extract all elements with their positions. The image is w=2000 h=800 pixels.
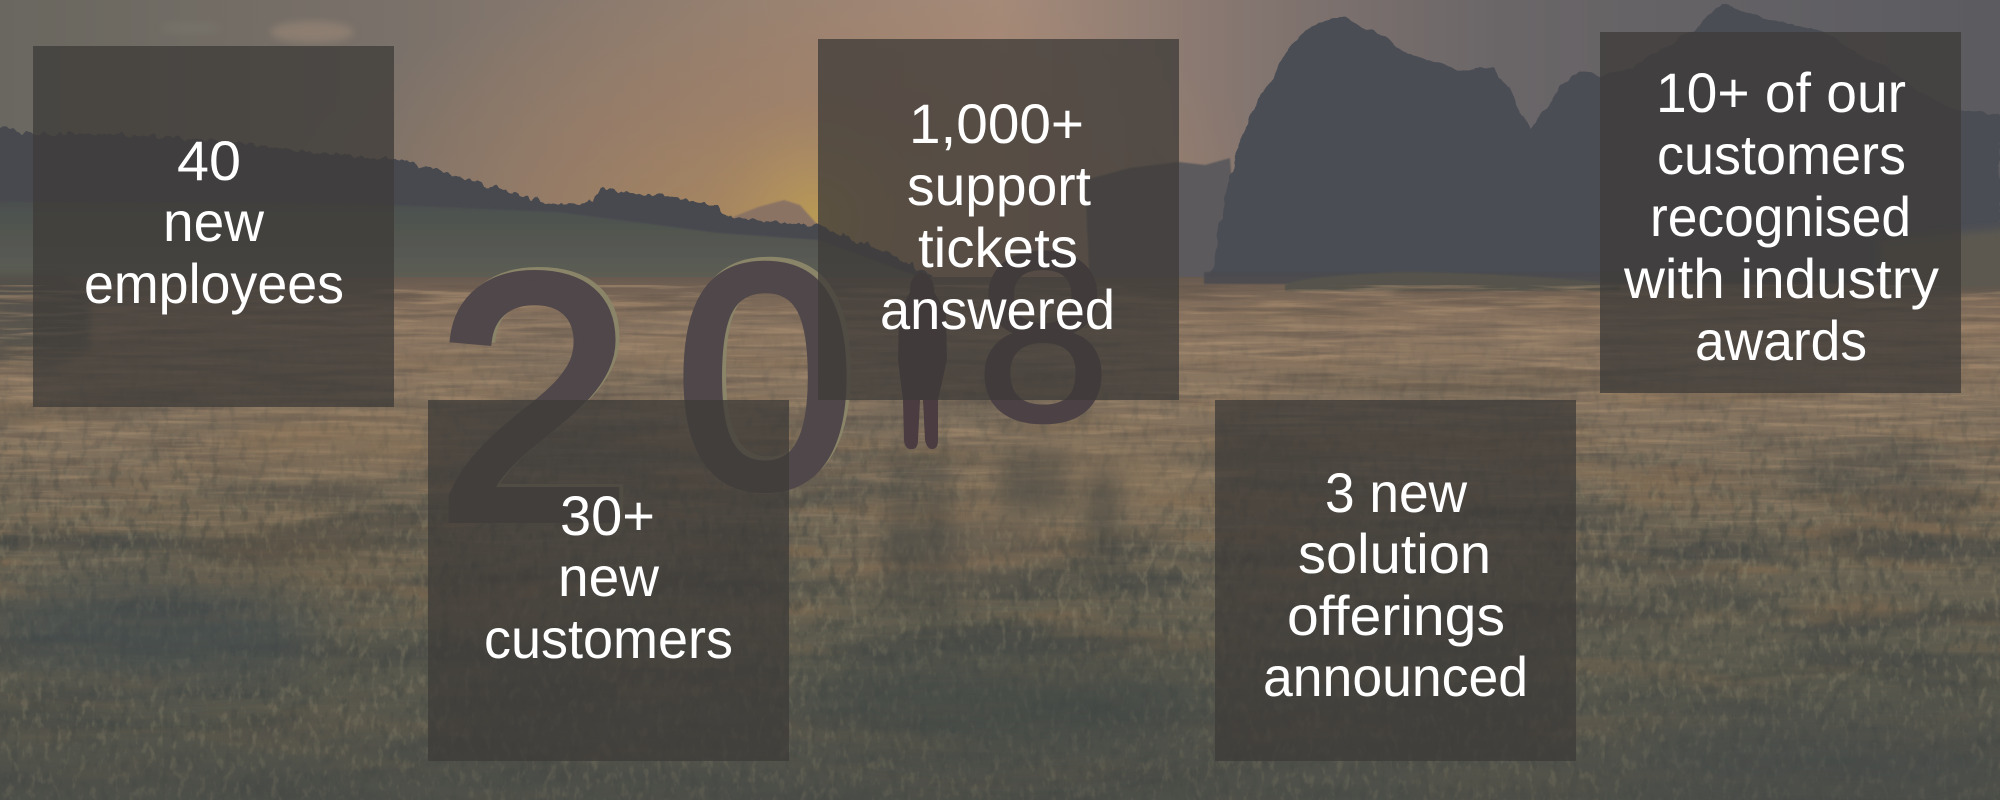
- stat text: customers: [484, 607, 733, 670]
- stat text: 30+: [560, 484, 655, 547]
- stat text: support: [907, 154, 1091, 217]
- background photo: sky: [0, 0, 2000, 300]
- stat text: customers: [1657, 123, 1906, 186]
- stat text: new: [163, 190, 265, 253]
- panel: 3 new solution offerings announced: [1215, 400, 1576, 761]
- person standing as digit 1: [898, 272, 947, 449]
- stat text: recognised: [1650, 185, 1911, 248]
- background photo: light and shadow patches: [0, 419, 2000, 800]
- stat text: 10+ of our: [1656, 61, 1906, 124]
- stat text: solution: [1298, 522, 1491, 585]
- panel: 1,000+ support tickets answered: [818, 39, 1179, 400]
- stat text: with industry: [1623, 247, 1939, 310]
- digit 0 rim: 0: [680, 197, 858, 548]
- stat text: announced: [1263, 645, 1528, 708]
- background photo: meadow: [0, 228, 2000, 800]
- stat text: employees: [84, 252, 344, 315]
- panel: 40 new employees: [33, 46, 394, 407]
- large year figure 2018 standing in the meadow: [436, 197, 1110, 592]
- digit 2: 2: [436, 203, 632, 592]
- stat text: awards: [1695, 309, 1867, 372]
- stat text: offerings: [1287, 584, 1505, 647]
- digit 0: 0: [676, 201, 854, 552]
- stat text: tickets: [918, 216, 1078, 279]
- panel: 10+ customers recognised with industry awards: [1600, 32, 1961, 393]
- panel: 30+ new customers: [428, 400, 789, 761]
- stat text: 1,000+: [909, 92, 1084, 155]
- stat text: answered: [880, 278, 1115, 341]
- background photo: figure shadows: [888, 450, 1121, 622]
- digit 2 rim: 2: [440, 200, 636, 589]
- stat text: 40: [177, 129, 241, 192]
- stat text: 3 new: [1325, 461, 1468, 524]
- digit 8: 8: [976, 203, 1110, 471]
- background photo: wooded hill on the left: [0, 125, 960, 290]
- background photo: distant mountains: [733, 3, 2000, 290]
- stat text: new: [558, 545, 660, 608]
